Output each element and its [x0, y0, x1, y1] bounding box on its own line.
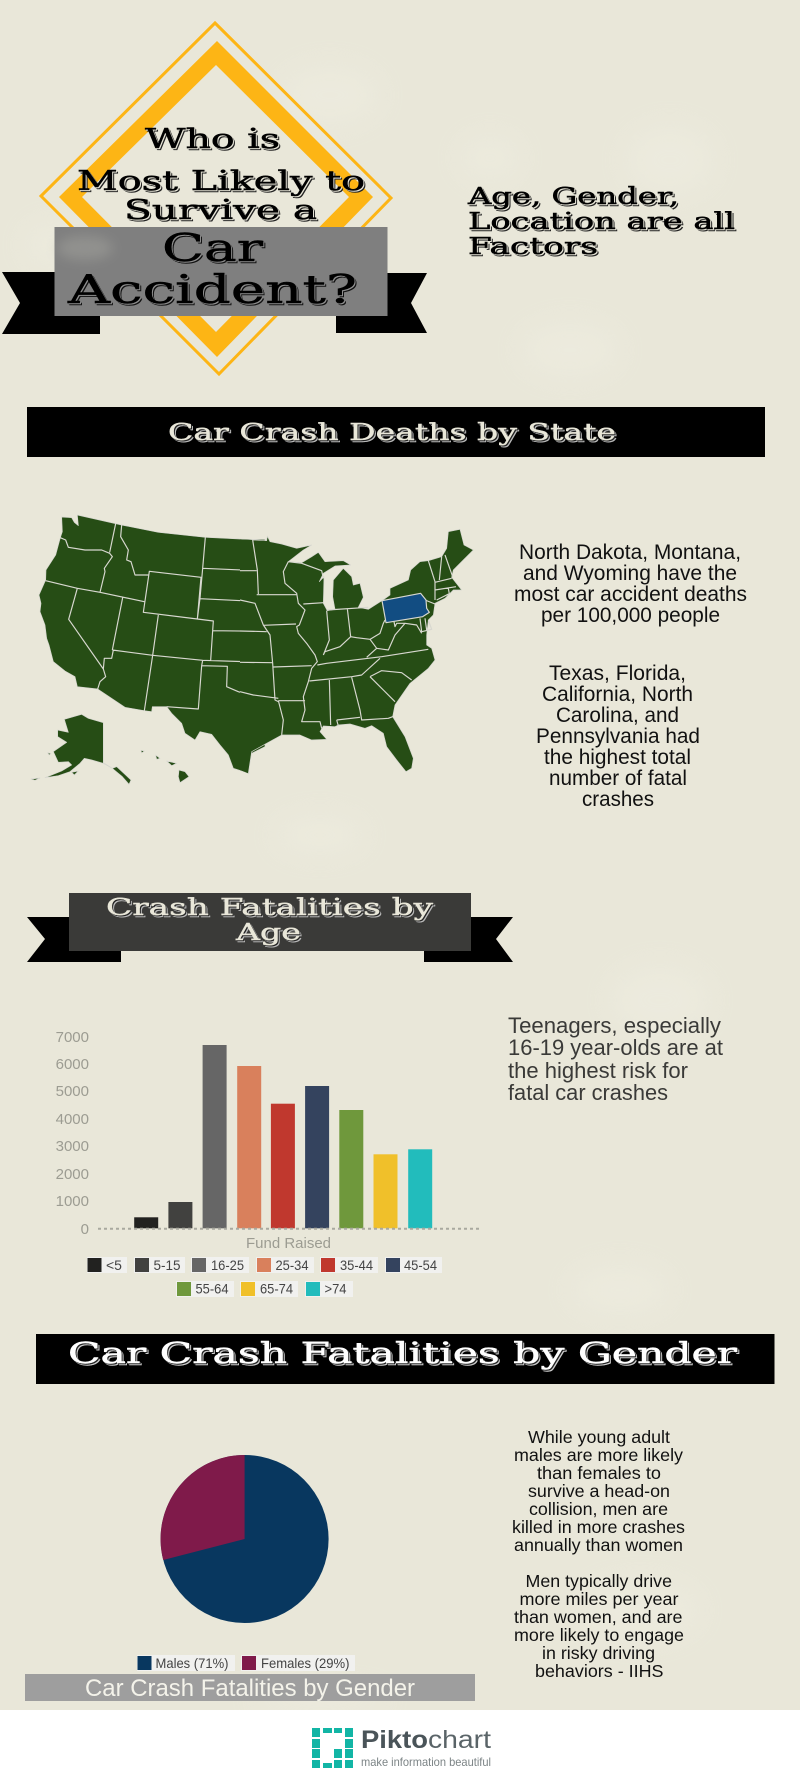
text: young adult males: males are more likely [514, 1445, 683, 1465]
y axis labels: 2000 [56, 1166, 89, 1183]
text: young adult males: While young adult [528, 1427, 670, 1447]
text: teenagers [508, 1013, 723, 1105]
map: eastern states [240, 529, 473, 773]
y axis labels [56, 1029, 89, 1238]
text: young adult males: annually than women [514, 1535, 683, 1555]
heading ribbon: crash fatalities by age [27, 893, 513, 962]
icon: Piktochart logo mark [312, 1728, 353, 1768]
chart legend: 55-64 [196, 1280, 229, 1296]
chart legend: 65-74 [260, 1280, 293, 1296]
text: men drive more miles [514, 1571, 684, 1681]
title: Who is [145, 124, 280, 155]
Piktochart wordmark: chart [428, 1726, 491, 1754]
chart legend: <5 [106, 1257, 122, 1273]
text: men drive more miles: more miles per year [520, 1589, 679, 1609]
y axis labels: 1000 [56, 1193, 89, 1210]
map: Alaska [31, 714, 131, 784]
text: deaths per capita [514, 541, 747, 627]
y axis labels: 4000 [56, 1111, 89, 1128]
text: young adult males: collision, men are [529, 1499, 668, 1519]
text: deaths per capita: per 100,000 people [541, 604, 720, 627]
text: total fatal crashes: Carolina, and [556, 704, 679, 727]
heading ribbon: crash fatalities by age: Crash Fatalities by [106, 895, 433, 921]
chart legend: 25-34 [276, 1257, 309, 1273]
US map [31, 515, 473, 784]
chart legend: 5-15 [154, 1257, 181, 1273]
title ribbon right tail [336, 273, 427, 333]
chart legend [87, 1257, 442, 1297]
text: teenagers: Teenagers, especially [508, 1013, 721, 1038]
heading: car crash fatalities by gender [36, 1334, 774, 1384]
Piktochart wordmark: make information beautiful [361, 1755, 491, 1769]
text: men drive more miles: in risky driving [542, 1643, 655, 1663]
text: total fatal crashes: California, North [542, 683, 693, 706]
pie legend: Females (29%) [261, 1655, 350, 1671]
Piktochart wordmark [361, 1726, 491, 1769]
text: deaths per capita: North Dakota, Montana, [519, 541, 741, 564]
bars [134, 1045, 432, 1228]
text: young adult males: survive a head-on [528, 1481, 670, 1501]
footer band [0, 1710, 800, 1783]
text: men drive more miles: more likely to engage [514, 1625, 684, 1645]
text: young adult males: killed in more crashes [512, 1517, 685, 1537]
pie legend: Males (71%) [156, 1655, 228, 1671]
heading: car crash fatalities by gender: Car Crash Fatalities by Gender [68, 1336, 737, 1370]
text: total fatal crashes: crashes [582, 788, 654, 811]
chart legend: 45-54 [404, 1257, 437, 1273]
heading: car crash deaths by state: Car Crash Deaths by State [168, 420, 616, 446]
text: total fatal crashes: Pennsylvania had [536, 725, 700, 748]
text: teenagers: fatal car crashes [508, 1080, 668, 1105]
title [67, 124, 365, 313]
map: Pennsylvania highlighted [382, 593, 429, 623]
chart legend: 35-44 [340, 1257, 373, 1273]
y axis labels: 6000 [56, 1056, 89, 1073]
text: total fatal crashes [536, 662, 700, 811]
y axis labels: 3000 [56, 1138, 89, 1155]
title gray banner [54, 227, 388, 316]
Piktochart wordmark: Pikto [361, 1726, 428, 1754]
title ribbon left tail [2, 272, 100, 334]
y axis labels: 0 [81, 1221, 89, 1238]
title: Survive a [124, 195, 317, 226]
pie legend [137, 1655, 355, 1671]
text: young adult males [512, 1427, 685, 1555]
x axis title: Fund Raised [246, 1235, 331, 1252]
chart legend: >74 [324, 1280, 347, 1296]
heading: car crash deaths by state [27, 407, 765, 457]
subtitle [467, 184, 735, 260]
text: teenagers: 16-19 year-olds are at [508, 1035, 723, 1060]
y axis labels: 5000 [56, 1083, 89, 1100]
text: teenagers: the highest risk for [508, 1058, 688, 1083]
gray caption bar: Car Crash Fatalities by Gender [85, 1675, 415, 1702]
pie chart: gender [161, 1455, 329, 1623]
heading ribbon: crash fatalities by age: Age [235, 920, 301, 946]
text: total fatal crashes: the highest total [544, 746, 691, 769]
map: western states [31, 515, 265, 784]
text: total fatal crashes: number of fatal [549, 767, 687, 790]
text: deaths per capita: and Wyoming have the [523, 562, 737, 585]
title: Accident? [67, 268, 357, 313]
map: Hawaii [141, 750, 189, 783]
title: Most Likely to [77, 166, 365, 197]
y axis labels: 7000 [56, 1029, 89, 1046]
bar chart: fatalities by age [56, 1029, 480, 1297]
text: young adult males: than females to [537, 1463, 661, 1483]
subtitle: Age, Gender, [467, 184, 679, 210]
subtitle: Factors [468, 234, 598, 260]
text: men drive more miles: than women, and are [514, 1607, 682, 1627]
text: deaths per capita: most car accident deaths [514, 583, 747, 606]
text: men drive more miles: behaviors - IIHS [535, 1661, 664, 1681]
subtitle: Location are all [468, 209, 735, 235]
chart legend: 16-25 [211, 1257, 244, 1273]
decorative yellow diamond [41, 23, 391, 374]
text: men drive more miles: Men typically drive [526, 1571, 672, 1591]
title: Car [162, 226, 264, 270]
text: total fatal crashes: Texas, Florida, [549, 662, 686, 685]
